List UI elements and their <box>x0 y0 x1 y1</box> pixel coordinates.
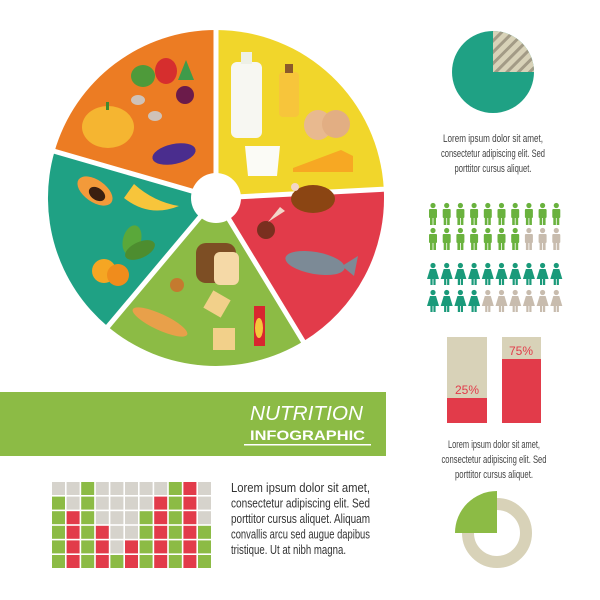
segment: grains (light green) <box>108 198 304 366</box>
text block: bottom paragraph: Lorem ipsum dolor sit amet, <box>231 481 370 495</box>
icons: protein <box>257 183 358 279</box>
center hole <box>191 173 241 223</box>
text block: bottom paragraph: convallis arcu sed augue dapibus <box>231 528 370 542</box>
pie chart: food groups <box>48 26 388 366</box>
bar chart: 25% / 75% <box>447 337 541 423</box>
bar chart: 25% / 75%: 25% <box>455 383 479 397</box>
icons: dairy <box>231 52 353 176</box>
text block: bottom paragraph: porttitor cursus aliquet. Aliquam <box>231 512 370 526</box>
segment: dairy (yellow) <box>216 30 384 198</box>
title banner: INFOGRAPHIC <box>250 427 365 443</box>
title banner: NUTRITION <box>250 403 364 425</box>
text block: top right: Lorem ipsum dolor sit amet, <box>443 133 543 145</box>
title banner <box>0 392 386 456</box>
text block: top right: porttitor cursus aliquet. <box>454 163 532 175</box>
donut chart <box>455 491 526 562</box>
text block: bottom paragraph: tristique. Ut at nibh magna. <box>231 543 346 557</box>
icons: grains <box>129 243 265 350</box>
people pictogram <box>427 203 562 312</box>
icons: fruits <box>72 171 179 286</box>
text block: bottom paragraph <box>231 481 370 557</box>
segment: fruits (teal) <box>48 152 216 327</box>
text block: top right: consectetur adipiscing elit. Sed <box>441 148 545 160</box>
text block: bottom paragraph: consectetur adipiscing elit. Sed <box>231 496 370 510</box>
text block: top right <box>441 133 545 175</box>
bar chart: 25% / 75%: 75% <box>509 344 533 358</box>
segment: protein (red) <box>216 189 384 341</box>
text block: middle right: consectetur adipiscing elit. Sed <box>442 454 546 466</box>
small pie chart <box>452 31 534 113</box>
grid chart <box>52 482 211 568</box>
segment: vegetables (orange) <box>54 30 216 198</box>
text block: middle right: porttitor cursus aliquet. <box>455 469 533 481</box>
text block: middle right <box>442 439 546 481</box>
text block: middle right: Lorem ipsum dolor sit amet, <box>448 439 540 451</box>
icons: vegetables <box>82 58 198 168</box>
